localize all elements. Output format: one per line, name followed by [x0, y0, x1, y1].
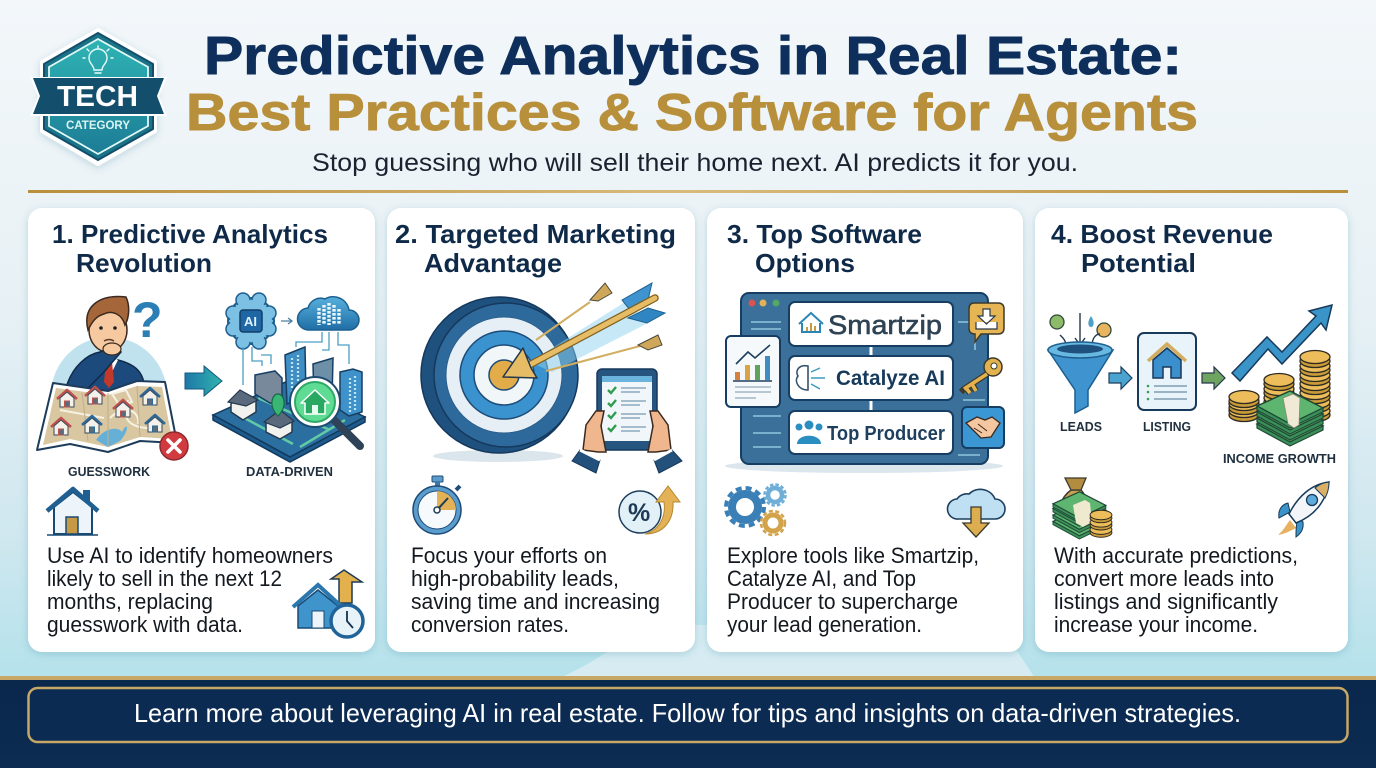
illustration: guesswork agent with map: [37, 292, 188, 460]
title: Predictive Analytics in Real Estate:: [204, 26, 1182, 86]
icon: download box: [969, 303, 1004, 342]
heading 3: 3. Top Software: [727, 219, 922, 249]
software row: smartzip: Smartzip: [828, 310, 942, 340]
label: listing: LISTING: [1143, 420, 1191, 434]
badge text: TECH: TECH: [57, 81, 138, 113]
body text 2: conversion rates.: [411, 612, 569, 637]
label: income growth: INCOME GROWTH: [1223, 452, 1336, 466]
heading 4: Potential: [1081, 248, 1196, 278]
badge: tech category: [30, 30, 167, 164]
heading 2: 2. Targeted Marketing: [395, 219, 676, 249]
body text 4: increase your income.: [1054, 612, 1258, 637]
callout: Learn more about leveraging AI in real estate. Follow for tips and insights on data-driven strategies.: [134, 698, 1241, 728]
software row: catalyze ai: Catalyze AI: [836, 367, 945, 390]
body text 3: [727, 543, 979, 637]
heading 3: [727, 219, 922, 278]
panel: targeted marketing advantage: [387, 208, 695, 652]
body text 2: [411, 543, 660, 637]
body text 4: convert more leads into: [1054, 566, 1274, 591]
chart document: [726, 336, 780, 407]
subtitle: Stop guessing who will sell their home next. AI predicts it for you.: [312, 149, 1078, 177]
heading 4: 4. Boost Revenue: [1051, 219, 1273, 249]
title: Best Practices & Software for Agents: [186, 84, 1198, 142]
icon: leads funnel: [1048, 313, 1113, 413]
body text 3: your lead generation.: [727, 612, 922, 637]
label: leads: LEADS: [1060, 420, 1102, 434]
gold divider: [28, 190, 1348, 193]
icon: stopwatch: [413, 476, 461, 534]
heading 4: [1051, 219, 1273, 278]
body text 1: [47, 543, 333, 637]
footer band: [0, 676, 1376, 768]
illustration: target with arrows: [421, 283, 665, 462]
icon: percent with up arrow: [619, 486, 680, 534]
icon: key: [961, 358, 1002, 393]
body text 2: high-probability leads,: [411, 566, 619, 591]
badge text: CATEGORY: CATEGORY: [66, 118, 130, 132]
body text 3: Producer to supercharge: [727, 589, 958, 614]
body text 2: saving time and increasing: [411, 589, 660, 614]
body text 1: likely to sell in the next 12: [47, 566, 282, 591]
illustration: income growth: [1229, 305, 1332, 446]
body text 1: months, replacing: [47, 589, 213, 614]
icon: question mark: ?: [132, 292, 163, 348]
icon: house value with clock: [293, 570, 363, 637]
body text 3: Catalyze AI, and Top: [727, 566, 916, 591]
icon: house: [47, 489, 98, 535]
panel: top software options: [707, 208, 1023, 652]
body text 1: guesswork with data.: [47, 612, 243, 637]
software row: top producer: Top Producer: [827, 423, 945, 445]
body text 1: Use AI to identify homeowners: [47, 543, 333, 568]
icon: red x: [160, 432, 188, 460]
software row: top producer: [789, 411, 953, 454]
map: [37, 381, 177, 452]
magnifier: [290, 377, 360, 446]
icon: money bag and cash: [1053, 478, 1112, 539]
icon: gears: [726, 484, 786, 535]
brain with ai chip: [226, 293, 276, 349]
heading 1: 1. Predictive Analytics: [52, 219, 328, 249]
panel: boost revenue potential: [1035, 208, 1348, 652]
panel: predictive analytics revolution: [28, 208, 375, 652]
icon: handshake: [962, 407, 1004, 448]
callout: [28, 688, 1348, 742]
heading 1: Revolution: [76, 248, 212, 278]
buildings: [255, 347, 362, 416]
brain with ai chip: AI: [244, 314, 257, 329]
icon: listing document: [1138, 333, 1196, 410]
illustration: tablet checklist in hands: [572, 369, 682, 473]
illustration: software window: [725, 293, 1004, 473]
software row: catalyze ai: [789, 356, 953, 400]
body text 2: Focus your efforts on: [411, 543, 607, 568]
body text 4: listings and significantly: [1054, 589, 1278, 614]
label: guesswork: GUESSWORK: [68, 465, 150, 479]
arrow: listing to income: [1202, 367, 1225, 389]
body text 3: Explore tools like Smartzip,: [727, 543, 979, 568]
software row: smartzip: [789, 302, 953, 346]
heading 3: Options: [755, 248, 855, 278]
body text 4: [1054, 543, 1298, 637]
heading 1: [52, 219, 328, 278]
heading 2: Advantage: [424, 248, 562, 278]
title: [186, 26, 1198, 142]
body text 4: With accurate predictions,: [1054, 543, 1298, 568]
arrow: guesswork to data: [185, 366, 222, 396]
data cloud: [297, 297, 359, 330]
heading 2: [395, 219, 676, 278]
icon: cloud download: [947, 489, 1005, 537]
arrow: leads to listing: [1109, 367, 1132, 389]
icon: percent with up arrow: %: [628, 499, 650, 527]
label: data-driven: DATA-DRIVEN: [246, 465, 333, 479]
icon: light bulb: [83, 46, 113, 73]
icon: rocket: [1278, 482, 1329, 537]
illustration: data-driven city: [213, 293, 365, 462]
